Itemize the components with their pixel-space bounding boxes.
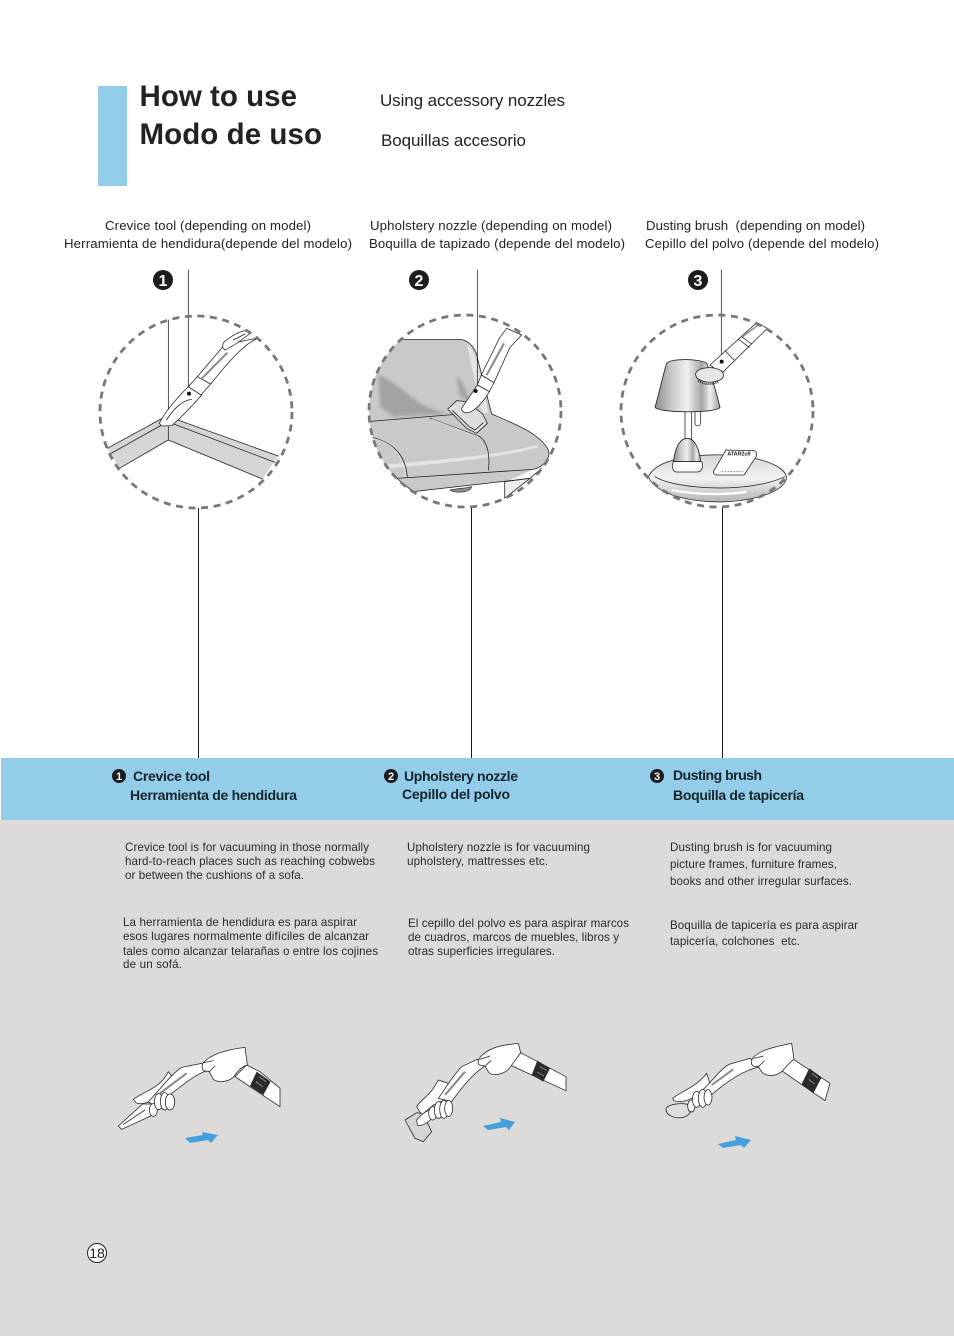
band heading 3 bbox=[650, 767, 804, 803]
caption: upholstery nozzle bbox=[369, 218, 625, 251]
body text 3 spanish: tapicería, colchones etc. bbox=[670, 935, 800, 948]
page number bbox=[88, 1244, 106, 1262]
page number: 18 bbox=[89, 1245, 105, 1261]
band heading 1: 1 bbox=[116, 771, 122, 783]
push arrow 3 bbox=[718, 1136, 751, 1148]
plate bbox=[648, 455, 787, 502]
body text 1 english bbox=[125, 841, 375, 882]
leader line 3 bbox=[722, 508, 724, 758]
body text 3 spanish: Boquilla de tapicería es para aspirar bbox=[670, 919, 858, 932]
caption: dusting brush: Dusting brush (depending on model) bbox=[646, 218, 865, 233]
leader line 2 bbox=[470, 508, 472, 758]
band heading 1 bbox=[112, 768, 297, 803]
body text 2 english: Upholstery nozzle is for vacuuming bbox=[407, 841, 590, 854]
body text 3 spanish bbox=[670, 919, 858, 948]
body text 3 english bbox=[670, 841, 852, 888]
body text 2 spanish: otras superficies irregulares. bbox=[408, 945, 555, 958]
lamp base bbox=[673, 438, 701, 462]
caption: crevice tool bbox=[64, 218, 352, 251]
background: grey lower page bbox=[0, 820, 954, 1336]
dashed circle bbox=[369, 315, 561, 507]
number badge 2: 2 bbox=[415, 273, 424, 290]
number badge 1: 1 bbox=[159, 273, 168, 290]
band heading 3: Boquilla de tapicería bbox=[673, 787, 804, 803]
dashed circle bbox=[100, 316, 292, 508]
body text 1 spanish bbox=[123, 916, 378, 971]
caption: dusting brush bbox=[645, 218, 879, 251]
body text 1 english: Crevice tool is for vacuuming in those normally bbox=[125, 841, 369, 854]
title bbox=[140, 80, 322, 151]
blue heading band bbox=[1, 758, 954, 820]
shade bbox=[655, 360, 720, 412]
illustration 3: dusting brush on lamp: ATAR2u9 bbox=[727, 452, 751, 458]
subtitle bbox=[380, 91, 565, 150]
number badge 3: 3 bbox=[694, 273, 703, 290]
card bbox=[714, 450, 757, 475]
caption: upholstery nozzle: Boquilla de tapizado (depende del modelo) bbox=[369, 236, 625, 251]
band heading 2: 2 bbox=[388, 771, 394, 783]
title block accent bbox=[98, 86, 127, 186]
band heading 2: Cepillo del polvo bbox=[402, 786, 510, 802]
subtitle: Using accessory nozzles bbox=[380, 91, 565, 110]
subtitle: Boquillas accesorio bbox=[381, 131, 526, 150]
body text 1 english: or between the cushions of a sofa. bbox=[125, 869, 304, 882]
body text 1 english: hard-to-reach places such as reaching cobwebs bbox=[125, 855, 375, 868]
body text 2 spanish: El cepillo del polvo es para aspirar marcos bbox=[408, 917, 629, 930]
body text 3 english: Dusting brush is for vacuuming bbox=[670, 841, 832, 854]
body text 1 spanish: La herramienta de hendidura es para aspirar bbox=[123, 916, 357, 929]
body text 2 spanish: de cuadros, marcos de muebles, libros y bbox=[408, 931, 619, 944]
caption: dusting brush: Cepillo del polvo (depende del modelo) bbox=[645, 236, 879, 251]
title: Modo de uso bbox=[140, 118, 322, 151]
caption: crevice tool: Crevice tool (depending on model) bbox=[105, 218, 311, 233]
body text 2 english bbox=[407, 841, 590, 868]
leader line 1 bbox=[198, 508, 200, 758]
dashed circle bbox=[621, 315, 813, 507]
title: How to use bbox=[140, 80, 297, 113]
hand illustration 2 bbox=[405, 1043, 566, 1142]
lamp stem bbox=[685, 410, 692, 440]
hand illustration 1 bbox=[118, 1047, 280, 1129]
band heading 1: Herramienta de hendidura bbox=[130, 787, 297, 803]
illustration 3: dusting brush on lamp bbox=[621, 270, 813, 507]
caption: crevice tool: Herramienta de hendidura(depende del modelo) bbox=[64, 236, 352, 251]
body text 3 english: picture frames, furniture frames, bbox=[670, 858, 837, 871]
push arrow 1 bbox=[185, 1132, 218, 1143]
wand bbox=[710, 323, 767, 373]
number badge 3 bbox=[688, 270, 708, 290]
body text 1 spanish: esos lugares normalmente difíciles de alcanzar bbox=[123, 930, 369, 943]
body text 1 spanish: tales como alcanzar telarañas o entre los cojines bbox=[123, 945, 378, 958]
number badge 2 bbox=[409, 270, 429, 290]
push arrow 2 bbox=[483, 1118, 515, 1130]
body text 3 english: books and other irregular surfaces. bbox=[670, 875, 852, 888]
illustration 1: crevice tool in corner bbox=[100, 270, 292, 508]
body text 2 spanish bbox=[408, 917, 629, 958]
band heading 2 bbox=[384, 768, 518, 802]
band heading 2: Upholstery nozzle bbox=[404, 768, 518, 784]
number badge 1 bbox=[153, 270, 173, 290]
hand illustration 3 bbox=[666, 1043, 830, 1118]
illustration 2: upholstery nozzle on sofa bbox=[360, 270, 561, 507]
band heading 1: Crevice tool bbox=[133, 768, 210, 784]
caption: upholstery nozzle: Upholstery nozzle (depending on model) bbox=[370, 218, 612, 233]
band heading 3: Dusting brush bbox=[673, 767, 762, 783]
band heading 3: 3 bbox=[654, 771, 660, 783]
body text 1 spanish: de un sofá. bbox=[123, 958, 182, 971]
body text 2 english: upholstery, mattresses etc. bbox=[407, 855, 548, 868]
